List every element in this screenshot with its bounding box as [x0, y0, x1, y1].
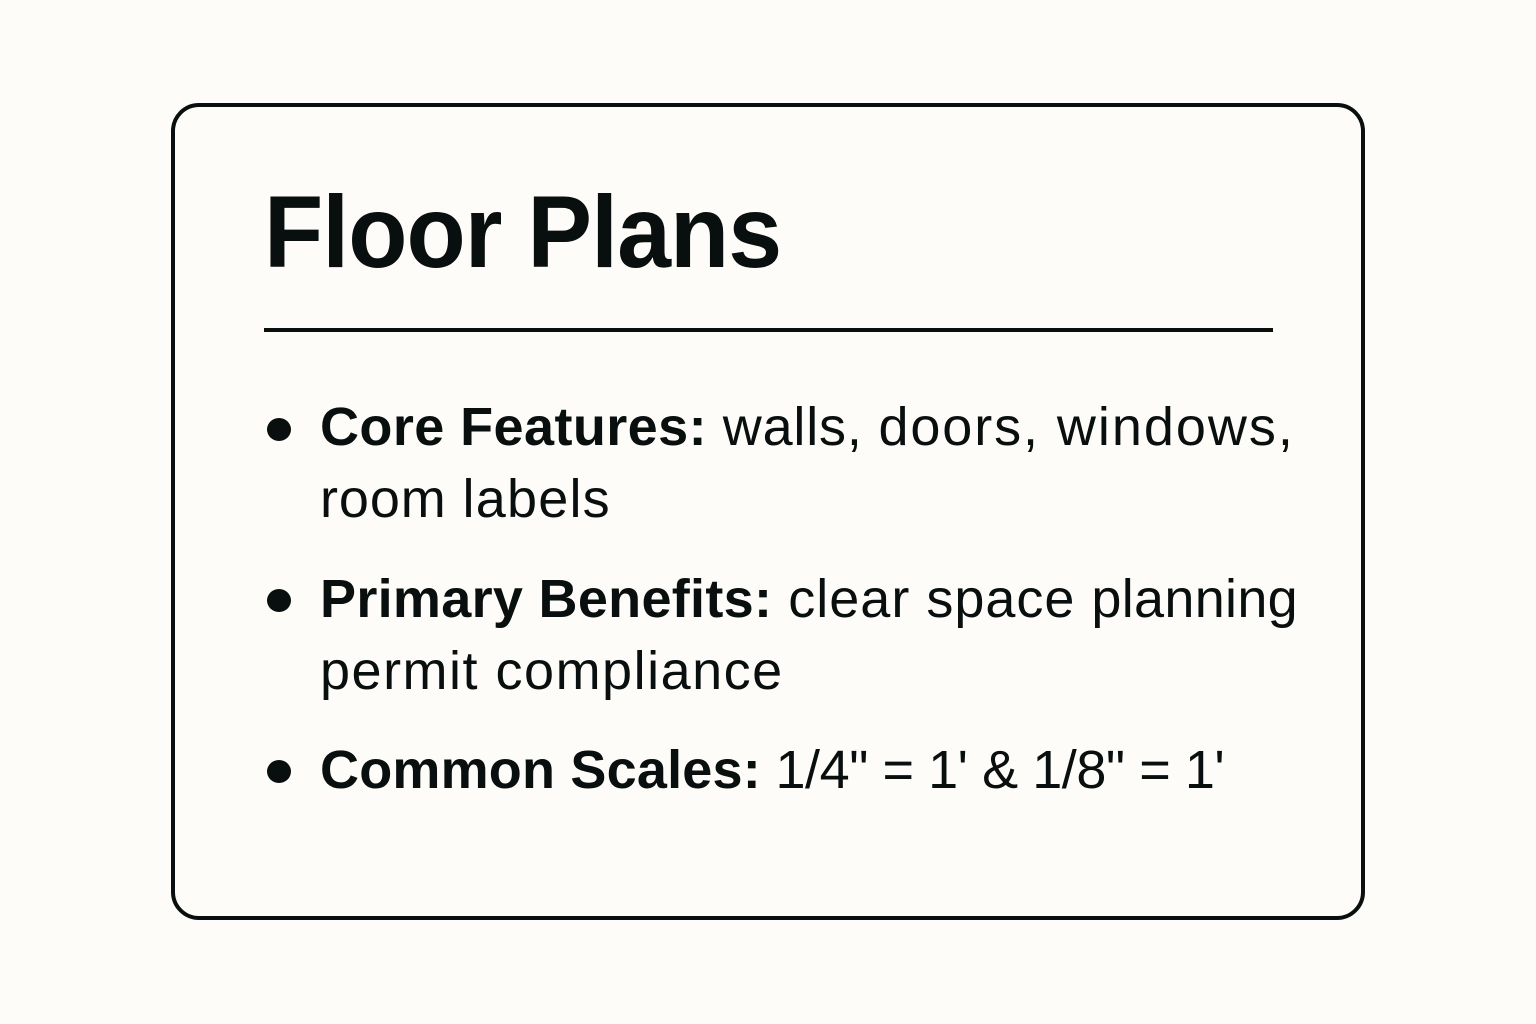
text: core features: room labels	[320, 469, 611, 529]
bullet icon: core features	[267, 418, 291, 441]
title: Floor Plans	[264, 175, 781, 289]
text: primary benefits	[320, 569, 1298, 701]
text: core features	[320, 397, 1295, 529]
text: primary benefits: Primary Benefits: clear space planning	[320, 569, 1298, 629]
panel: floor plans card	[171, 103, 1365, 920]
text: primary benefits: permit compliance	[320, 641, 784, 701]
text: common scales: Common Scales: 1/4" = 1' & 1/8" = 1'	[320, 740, 1224, 800]
bullet icon: common scales	[267, 760, 291, 783]
text: core features: Core Features: walls, doors, windows,	[320, 397, 1295, 457]
bullet icon: primary benefits	[267, 589, 291, 612]
